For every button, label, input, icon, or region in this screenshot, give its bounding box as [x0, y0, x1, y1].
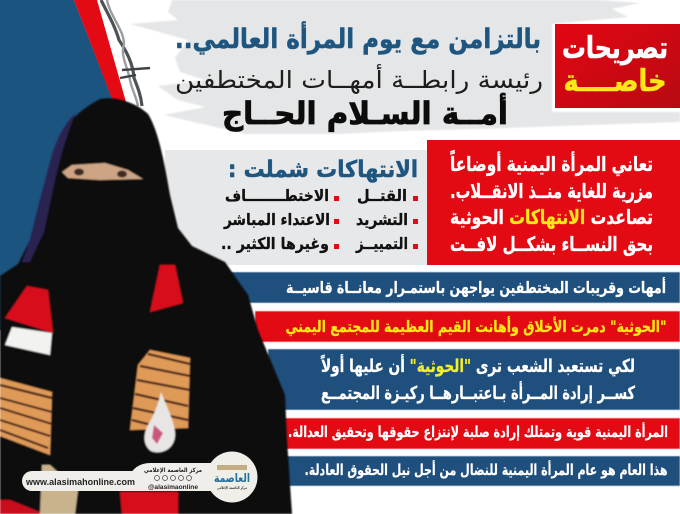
left scarf	[0, 286, 53, 514]
eye slit	[62, 163, 143, 180]
barbed wire	[101, 0, 150, 106]
header grey brush background	[130, 0, 680, 134]
violations items: الاختطــــــــاف	[225, 186, 329, 205]
blood drop badge	[145, 392, 175, 452]
purple robe edge	[22, 113, 76, 262]
violations items: التمييــز	[355, 234, 408, 253]
panel: red statement box	[427, 140, 680, 265]
blue background panel	[0, 0, 190, 330]
bar 3: لكي تستعبد الشعب ترى "الحوثية" أن عليها أولاً	[320, 354, 635, 377]
violations grey panel	[165, 150, 430, 265]
panel: violations list	[221, 157, 418, 253]
violations items	[221, 186, 408, 253]
social panel	[128, 463, 215, 491]
violations items: الاعتداء المباشر	[223, 210, 330, 229]
violations items: القتــل	[357, 186, 407, 205]
title	[175, 21, 543, 132]
bar 5	[285, 456, 680, 486]
title: بالتزامن مع يوم المرأة العالمي..	[175, 21, 541, 55]
bar 4	[285, 418, 680, 449]
violations bullets	[334, 196, 418, 249]
eyes	[74, 168, 127, 178]
bar 1	[225, 272, 680, 303]
bar 3	[268, 349, 680, 410]
violations items: وغيرها الكثير ..	[221, 234, 329, 253]
logo strip	[22, 452, 258, 502]
violations heading: الانتهاكات شملت :	[228, 157, 418, 183]
website pill	[22, 471, 237, 491]
logo strip: مركز العاصمة الإعلامي	[144, 467, 202, 474]
robe and niqab	[0, 98, 292, 514]
heading: special statements box	[555, 24, 680, 108]
logo strip: www.alasimahonline.com	[25, 477, 135, 488]
title: رئيسة رابطــة أمهــات المختطفين	[175, 64, 543, 94]
logo strip: العاصمة	[214, 471, 250, 485]
right scarf	[40, 265, 190, 514]
logo strip: @alasimaonline	[148, 485, 199, 491]
title: أمــة السـلام الحــاج	[222, 93, 508, 132]
woman figure	[0, 98, 292, 514]
violations items: التشريد	[356, 210, 408, 229]
logo strip: مركز العاصمة الإعلامي	[217, 485, 247, 491]
logo circle	[206, 452, 258, 502]
red diagonal stripe	[74, 0, 126, 104]
panel: red statement box: تصاعدت الانتهاكات الحوثية	[450, 205, 653, 229]
bar 2	[255, 311, 680, 342]
